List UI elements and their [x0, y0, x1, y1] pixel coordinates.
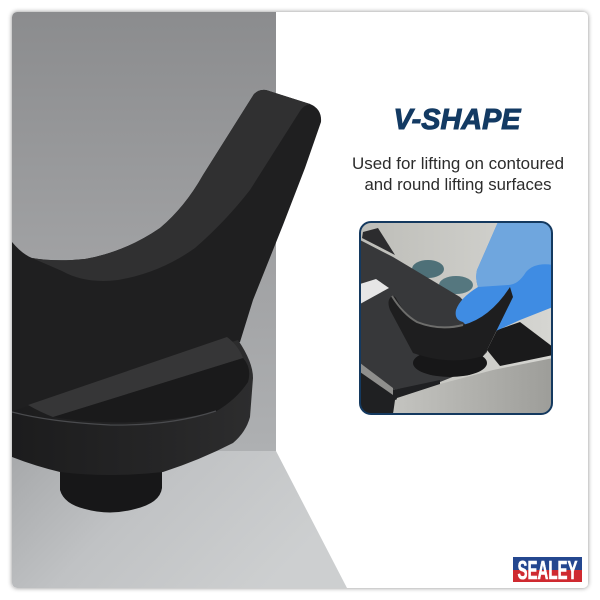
- saddle curved lighter edge: [32, 90, 310, 281]
- blue glove: [456, 223, 551, 331]
- photo background: [360, 222, 552, 414]
- dark object rear left: [362, 228, 395, 255]
- heading: V-SHAPE: [394, 104, 522, 136]
- weld rib: [28, 337, 243, 417]
- logo red band: [513, 570, 582, 582]
- disc top face: [104, 358, 250, 422]
- metal front rail: [393, 358, 553, 414]
- grey studio backdrop: [12, 12, 347, 588]
- saddle body: [12, 90, 321, 420]
- description line 1: Used for lifting on contoured: [352, 154, 564, 173]
- photo saddle inner edge: [392, 296, 463, 327]
- disc highlight: [12, 411, 216, 425]
- dark jack platform: [360, 240, 490, 390]
- photo border: [360, 222, 552, 414]
- logo blue band: [513, 557, 582, 570]
- saddle base disc: [12, 340, 253, 475]
- SEALEY logo: [513, 555, 582, 585]
- photo saddle disc: [413, 355, 487, 377]
- round sockets: [412, 260, 444, 278]
- rear dark pad: [487, 322, 553, 366]
- platform front edge: [360, 363, 440, 414]
- saddle stem: [60, 472, 162, 512]
- white label: [360, 279, 389, 304]
- photo saddle: [388, 287, 513, 360]
- inset photo: [360, 222, 553, 414]
- product: V-shape saddle: [12, 90, 321, 512]
- description line 2: and round lifting surfaces: [364, 175, 552, 194]
- glove upper wrinkled: [476, 222, 553, 287]
